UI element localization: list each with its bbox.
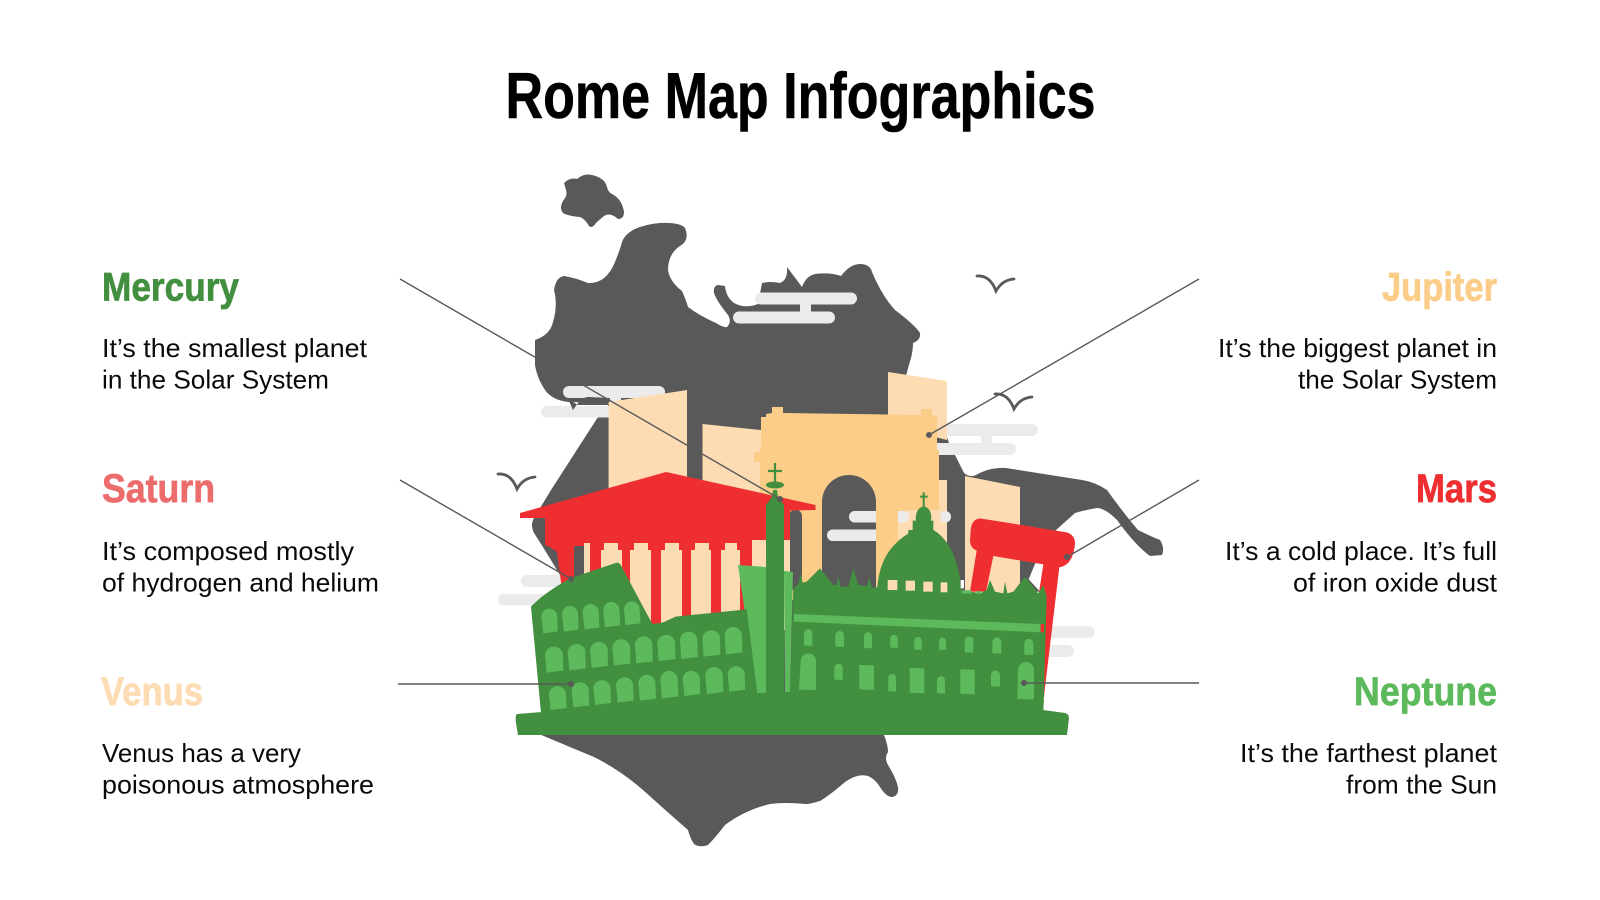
dome windows <box>888 580 947 592</box>
panel: Neptune <box>1240 670 1498 800</box>
heading: Saturn: Saturn <box>102 467 215 511</box>
peach background buildings <box>609 372 1020 610</box>
text: Saturn description: It’s composed mostly <box>102 536 354 566</box>
text: Saturn description <box>102 536 379 598</box>
birds <box>498 276 1032 489</box>
map of Rome with landmarks <box>498 174 1163 846</box>
obelisk <box>766 463 784 694</box>
text: Venus description <box>102 738 374 800</box>
palace windows <box>799 629 1034 699</box>
colosseum <box>531 563 757 720</box>
text: Mercury description <box>102 333 368 394</box>
ground base <box>516 692 1069 735</box>
connector lines <box>398 279 1199 687</box>
panel: Mars <box>1225 467 1498 598</box>
heading: Jupiter: Jupiter <box>1382 266 1497 310</box>
panel: Mercury <box>102 266 368 394</box>
text: Jupiter description: the Solar System <box>1298 364 1497 394</box>
text: Neptune description: It’s the farthest planet <box>1240 738 1498 768</box>
red temple <box>520 472 816 630</box>
text: Jupiter description <box>1218 333 1497 394</box>
vatican palace and dome <box>790 492 1047 713</box>
heading: Neptune: Neptune <box>1354 670 1497 714</box>
text: Saturn description: of hydrogen and helium <box>102 568 379 598</box>
text: Venus description: Venus has a very <box>102 738 301 768</box>
text: Mars description <box>1225 536 1498 598</box>
map: grey landmass <box>532 174 1163 846</box>
text: Venus description: poisonous atmosphere <box>102 770 374 800</box>
light green building <box>738 565 793 695</box>
triumphal arch <box>754 407 951 600</box>
text: Neptune description: from the Sun <box>1346 770 1497 800</box>
palace band <box>794 614 1041 632</box>
roof accents <box>962 590 981 594</box>
title: Rome Map Infographics <box>506 59 1096 132</box>
panel: Jupiter <box>1218 266 1497 394</box>
text: Neptune description <box>1240 738 1498 800</box>
panel: Saturn <box>102 467 379 598</box>
text: Mercury description: It’s the smallest planet <box>102 333 368 363</box>
clouds <box>498 292 1095 657</box>
red ruin arch <box>970 518 1075 702</box>
text: Jupiter description: It’s the biggest planet in <box>1218 333 1497 363</box>
heading: Mercury: Mercury <box>102 266 240 310</box>
bird on cloud <box>568 397 609 410</box>
text: Mercury description: in the Solar System <box>102 364 329 394</box>
panel: Venus <box>101 670 374 800</box>
heading: Mars: Mars <box>1416 467 1497 511</box>
heading: Venus: Venus <box>101 670 203 714</box>
colosseum arches <box>541 602 745 710</box>
text: Mars description: It’s a cold place. It’s full <box>1225 536 1497 566</box>
text: Mars description: of iron oxide dust <box>1293 568 1498 598</box>
